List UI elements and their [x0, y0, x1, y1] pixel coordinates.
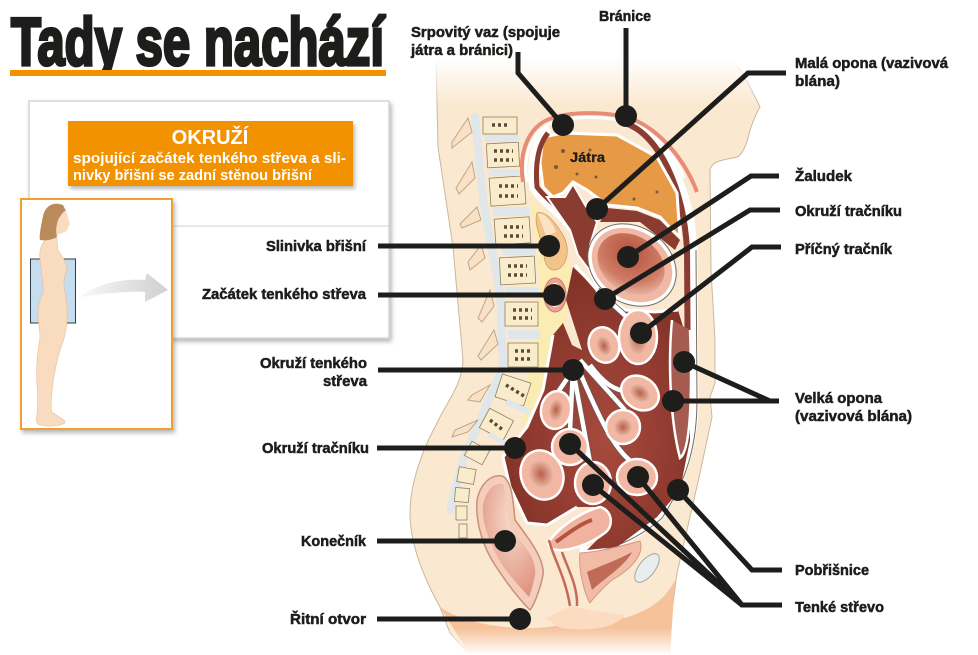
duodenum [544, 278, 566, 312]
callout: okruží definition: OKRUŽÍ [172, 125, 249, 149]
leader line: Žaludek [617, 176, 779, 268]
stomach [572, 207, 692, 323]
labels: right column: blána) [795, 74, 840, 90]
vertebra marrow dots [490, 125, 532, 430]
intestine loops [514, 310, 666, 506]
leader line: Řitní otvor [377, 608, 531, 630]
leader line: Okruží tračníku right [594, 210, 780, 310]
mesentery strands [556, 290, 632, 462]
bladder [580, 541, 641, 603]
arrow [80, 273, 168, 302]
panel: body locator [21, 199, 172, 429]
title [0, 4, 400, 90]
labels: top: Bránice [599, 9, 651, 25]
anterior wall band [580, 127, 694, 552]
leader line: Konečník [377, 530, 516, 552]
labels: right column: Pobřišnice [795, 563, 869, 579]
labels: right column: Příčný tračník [795, 242, 893, 258]
labels: left column: Konečník [301, 534, 367, 550]
callout: okruží definition: nivky břišní se zadní stěnou břišní [73, 168, 313, 184]
leader line: Bránice [615, 28, 637, 127]
pubic bone [630, 550, 664, 586]
pancreas [536, 213, 567, 270]
leader line: Začátek tenkého střeva [378, 284, 565, 306]
vertebrae [454, 117, 538, 538]
labels: left column: Slinivka břišní [266, 239, 367, 255]
leader line: Tenké střevo [559, 433, 782, 605]
labels: left column: Řitní otvor [290, 610, 366, 628]
uterus [548, 507, 611, 550]
thigh shading [440, 580, 675, 655]
rectum [477, 476, 543, 610]
leader line: Okruží tenkého střeva [378, 359, 584, 381]
panel: okruží info box [29, 101, 389, 338]
leader line: Srpovitý vaz [518, 52, 574, 136]
labels: right column: Malá opona (vazivová [795, 56, 949, 72]
leader line: Slinivka břišní [378, 235, 560, 257]
title: Tady se nachází [11, 4, 386, 80]
body skin [410, 50, 760, 655]
labels: right column: Velká opona [795, 391, 883, 407]
leader line: Malá opona [586, 73, 786, 220]
labels: right column: Okruží tračníku [795, 204, 902, 220]
pale fat strip [520, 195, 572, 430]
labels: top: Srpovitý vaz (spojuje [411, 25, 560, 41]
labels: top [410, 9, 651, 59]
leader line: Pobřišnice [667, 479, 782, 570]
labels: right column: Tenké střevo [795, 600, 884, 616]
spinal cord [450, 117, 503, 510]
labels: left column: střeva [323, 374, 368, 390]
labels: left column: Začátek tenkého střeva [202, 287, 367, 303]
spinous processes [452, 118, 498, 437]
cavity: lower abdomen [503, 267, 690, 550]
greater omentum fold [670, 320, 691, 458]
leader line: Okruží tračníku left [377, 437, 526, 459]
posterior peritoneal band [532, 128, 612, 302]
labels: top: játra a bránici) [410, 43, 513, 59]
leader line: Příčný tračník [630, 247, 781, 344]
labels: right column: (vazivová blána) [795, 409, 912, 425]
leader line: Velká opona [662, 351, 779, 412]
diaphragm [522, 113, 697, 192]
highlighted abdomen region [30, 259, 76, 323]
labels: left column [202, 239, 369, 628]
anatomical illustration [400, 46, 800, 655]
icon: human silhouette [36, 204, 70, 426]
vertebra discs [485, 135, 540, 449]
labels: left column: Okruží tenkého [260, 356, 367, 372]
labels: right column [795, 56, 949, 616]
liver [540, 133, 680, 237]
mesentery of stomach [547, 184, 604, 282]
liver spots [554, 148, 658, 200]
labels: left column: Okruží tračníku [262, 441, 369, 457]
vagina and urethra lines [549, 540, 577, 606]
callout: okruží definition [68, 121, 353, 186]
callout: okruží definition: spojující začátek tenkého střeva a sli- [73, 151, 346, 167]
labels: right column: Žaludek [795, 167, 853, 185]
liver label: Játra [570, 149, 605, 165]
